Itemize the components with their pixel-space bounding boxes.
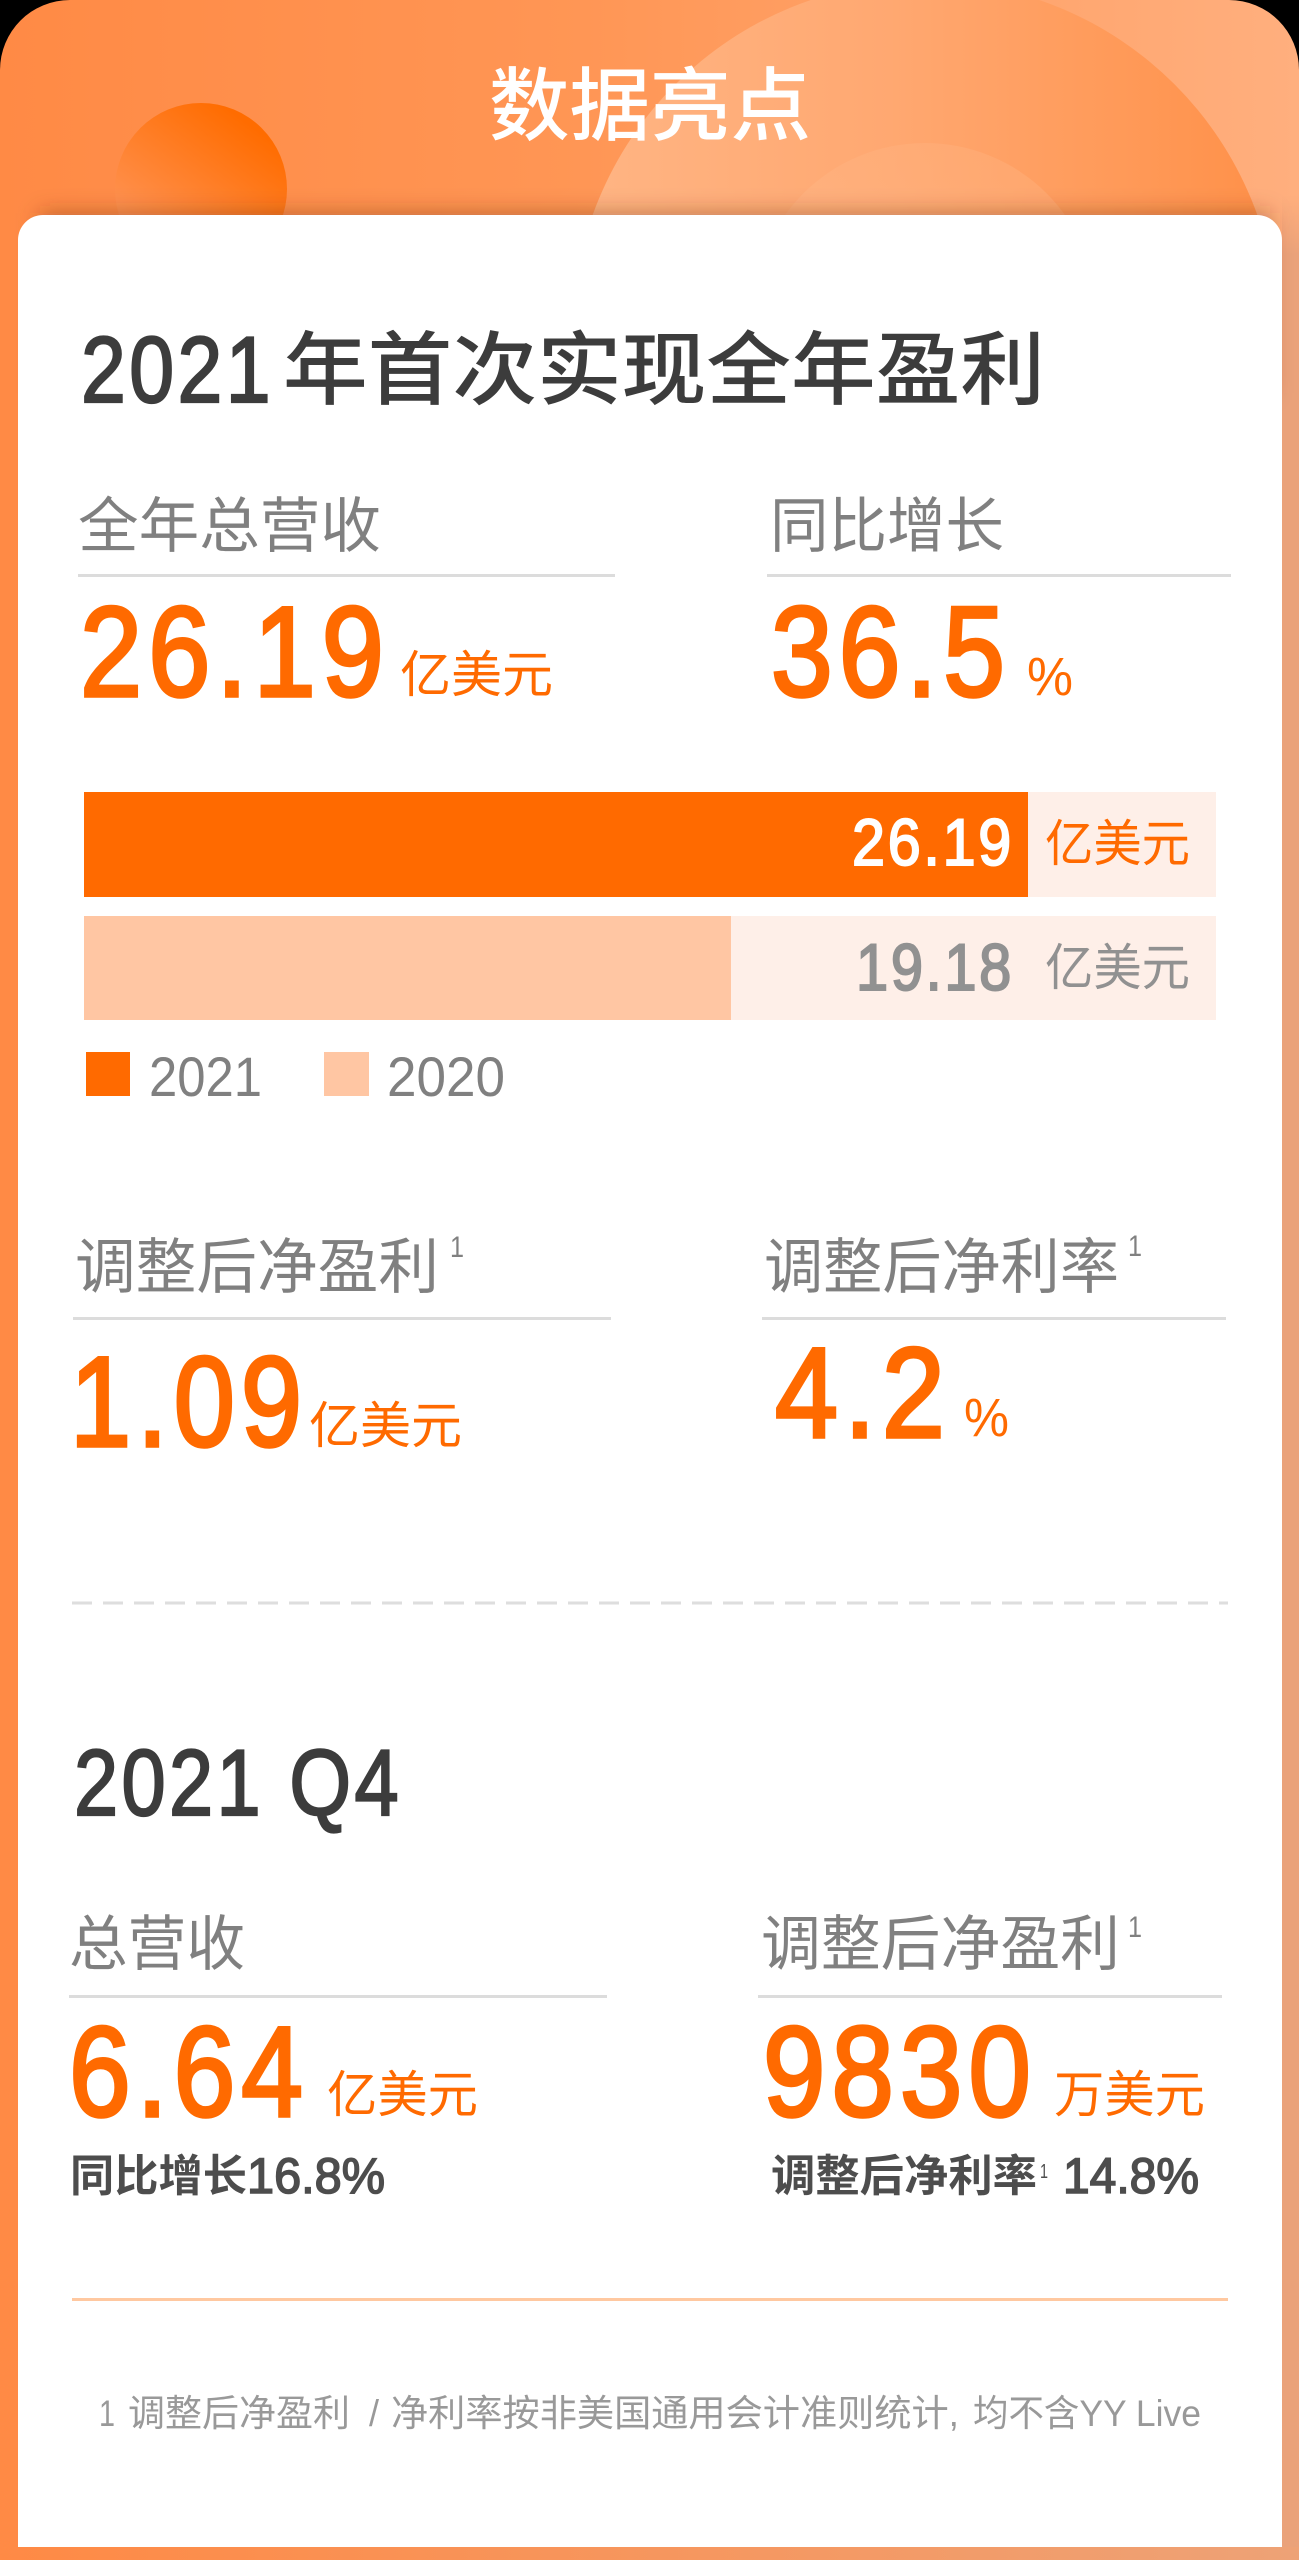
metric: adjusted net margin: % — [964, 1388, 1009, 1448]
metric: adjusted net margin: 1 — [1128, 1230, 1142, 1263]
metric: Q4 revenue: 16.8% — [247, 2148, 385, 2204]
metric: adjusted net profit: 调整后净盈利 — [75, 1219, 439, 1306]
metric: Q4 revenue: 总营收 — [69, 1896, 245, 1983]
metric: Q4 revenue: 同比增长 — [70, 2140, 247, 2204]
legend — [86, 1045, 505, 1108]
heading: 2021 Q4: 2021 Q4 — [74, 1730, 402, 1835]
metric: full year revenue: 亿美元 — [400, 635, 553, 707]
legend: 2021 — [149, 1045, 262, 1108]
metric: year over year growth: 同比增长 — [770, 478, 1004, 565]
metric: Q4 adjusted net profit: 1 — [1040, 2161, 1048, 2183]
footnote: / — [369, 2393, 380, 2434]
metric: adjusted net margin: 调整后净利率 — [764, 1219, 1119, 1306]
bar chart: revenue 2021 vs 2020: 19.18 — [856, 930, 1014, 1004]
metric: Q4 revenue: 亿美元 — [327, 2055, 478, 2127]
footnote: 调整后净盈利 — [128, 2393, 350, 2434]
metric: adjusted net profit: 1.09 — [70, 1331, 308, 1474]
metric: full year revenue: 全年总营收 — [78, 478, 381, 565]
bar chart: revenue 2021 vs 2020: 亿美元 — [1045, 928, 1190, 1000]
metric: Q4 adjusted net profit: 万美元 — [1054, 2055, 1205, 2127]
footnote: 1 — [99, 2393, 115, 2434]
metric: full year revenue — [78, 478, 615, 724]
bar chart: revenue 2021 vs 2020 — [84, 792, 1216, 1020]
footnote: 净利率按非美国通用会计准则统计, — [391, 2393, 959, 2434]
footnote — [99, 2393, 1201, 2434]
bar chart: revenue 2021 vs 2020: 亿美元 — [1045, 804, 1190, 876]
metric: adjusted net profit — [70, 1219, 611, 1474]
metric: year over year growth — [767, 478, 1231, 724]
metric: Q4 revenue: 6.64 — [69, 2001, 309, 2144]
footnote: 均不含YY Live — [973, 2393, 1201, 2434]
metric: year over year growth: % — [1027, 647, 1073, 707]
heading: full year profit: 2021 — [81, 317, 274, 422]
metric: Q4 adjusted net profit — [758, 1896, 1222, 2204]
metric: adjusted net profit: 亿美元 — [309, 1386, 462, 1458]
metric: Q4 adjusted net profit: 调整后净盈利 — [761, 1896, 1120, 1983]
legend: 2020 — [387, 1045, 505, 1108]
bar chart: revenue 2021 vs 2020: 26.19 — [852, 805, 1014, 879]
metric: adjusted net profit: 1 — [450, 1231, 464, 1264]
heading: full year profit: 年首次实现全年盈利 — [283, 306, 1045, 422]
metric: Q4 adjusted net profit: 1 — [1128, 1911, 1142, 1944]
metric: Q4 adjusted net profit: 调整后净利率 — [771, 2140, 1037, 2204]
metric: Q4 adjusted net profit: 9830 — [763, 2001, 1037, 2144]
metric: year over year growth: 36.5 — [771, 581, 1011, 724]
metric: adjusted net margin — [762, 1219, 1226, 1465]
metric: Q4 adjusted net profit: 14.8% — [1063, 2148, 1199, 2204]
metric: Q4 revenue — [69, 1896, 607, 2204]
metric: full year revenue: 26.19 — [80, 581, 390, 724]
metric: adjusted net margin: 4.2 — [775, 1322, 951, 1465]
title: 数据亮点 — [489, 42, 811, 158]
